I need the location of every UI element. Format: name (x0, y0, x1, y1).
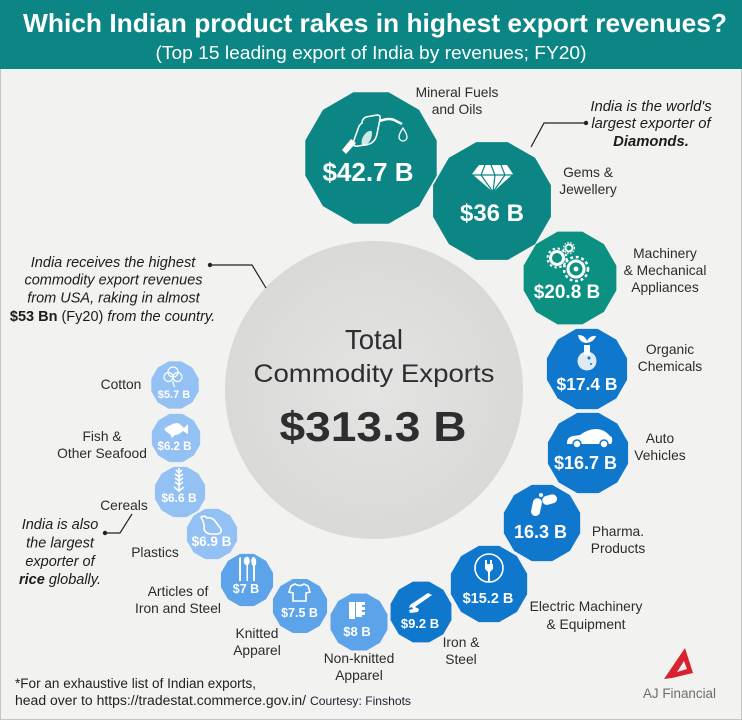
callout: USA revenue: commodity export revenues (24, 272, 203, 288)
center circle: total commodity exports (225, 241, 523, 539)
badge: auto vehicles: $16.7 B (554, 453, 617, 473)
badge: plastics: $6.9 B (192, 534, 232, 549)
center circle: total commodity exports: Commodity Exports (254, 360, 494, 388)
icon: cotton (164, 367, 182, 387)
label: auto vehicles: Vehicles (634, 448, 686, 463)
icon: fish (164, 423, 188, 438)
label: knitted apparel: Apparel (233, 643, 281, 658)
icon: capsules (530, 493, 558, 517)
callout: USA revenue: from USA, raking in almost (27, 290, 201, 306)
label: cotton: Cotton (101, 377, 141, 392)
badge: pharma (504, 485, 580, 561)
icon: wheat (174, 468, 184, 492)
label: iron and steel: Steel (445, 652, 477, 667)
icon: fuel nozzle (342, 115, 407, 154)
label: gems: Gems & (563, 165, 613, 180)
badge: knitted apparel (273, 579, 327, 633)
badge: cotton: $5.7 B (158, 389, 190, 401)
badge: articles of iron and steel: $7 B (233, 582, 259, 596)
label: auto vehicles: Auto (646, 431, 674, 446)
label: knitted apparel: Knitted (236, 626, 278, 641)
label: mineral fuels: Mineral Fuels (416, 85, 498, 100)
logo: AJ Financial: AJ Financial (643, 686, 716, 701)
label: organic chemicals: Organic (646, 342, 694, 357)
badge: articles of iron and steel (221, 554, 273, 606)
icon: car (567, 429, 612, 448)
badge: non-knitted apparel (331, 594, 387, 650)
badge: auto vehicles (548, 413, 628, 493)
label: fish and seafood: Other Seafood (57, 446, 147, 461)
label: cereals: Cereals (100, 498, 148, 513)
callout: rice (19, 514, 132, 588)
badge: organic chemicals: $17.4 B (557, 374, 617, 394)
callout: rice: India is also (22, 517, 98, 533)
label: iron and steel: Iron & (443, 635, 479, 650)
badge: electric machinery: $15.2 B (463, 591, 513, 607)
icon: fabric roll (349, 602, 365, 619)
badge: machinery (524, 232, 616, 324)
label: machinery: Machinery (633, 246, 697, 261)
label: pharma: Products (591, 541, 645, 556)
callout: rice: exporter of (25, 554, 97, 570)
badge: iron and steel: $9.2 B (401, 616, 439, 631)
label: organic chemicals: Chemicals (638, 359, 702, 374)
icon: diamond (472, 165, 513, 192)
center circle: total commodity exports: $313.3 B (280, 403, 466, 450)
label: mineral fuels: and Oils (432, 102, 482, 117)
badge: organic chemicals (547, 329, 627, 409)
icon: gears (548, 242, 588, 281)
title: Which Indian product rakes in highest export revenues? (23, 8, 727, 38)
callout: diamonds: Diamonds. (613, 134, 689, 150)
badge: iron and steel (391, 582, 451, 642)
badge: non-knitted apparel: $8 B (343, 624, 371, 639)
footnote: head over to https://tradestat.commerce.gov.in/ (15, 693, 306, 708)
badge: cereals: $6.6 B (161, 491, 197, 505)
badge: fish and seafood: $6.2 B (158, 441, 191, 453)
badge: knitted apparel: $7.5 B (281, 606, 318, 620)
badge: machinery: $20.8 B (534, 282, 600, 303)
callout: rice: the largest (26, 536, 95, 552)
label: fish and seafood: Fish & (82, 429, 122, 444)
label: machinery: & Mechanical (624, 263, 706, 278)
icon: steel beam (409, 593, 432, 613)
icon: plastic bag (201, 516, 221, 534)
badge: mineral fuels and oils (305, 92, 437, 224)
callout: USA revenue: India receives the highest (31, 255, 195, 271)
footnote (15, 676, 306, 708)
callout: diamonds (531, 99, 713, 150)
courtesy: Courtesy: Finshots (310, 694, 411, 708)
icon: plug (475, 554, 503, 582)
label: machinery: Appliances (631, 280, 699, 295)
center circle: total commodity exports: Total (345, 324, 403, 355)
header banner (0, 0, 742, 69)
icon: t-shirt (289, 584, 310, 601)
label: non-knitted apparel: Non-knitted (324, 651, 394, 666)
label: non-knitted apparel: Apparel (335, 668, 383, 683)
logo: AJ Financial (643, 648, 716, 701)
badge: gems and jewellery: $36 B (460, 200, 524, 227)
label: electric machinery: & Equipment (546, 617, 626, 632)
callout: diamonds: largest exporter of (591, 116, 713, 132)
badge: fish and seafood (152, 414, 200, 462)
label: electric machinery: Electric Machinery (530, 599, 642, 614)
subtitle: (Top 15 leading export of India by revenues; FY20) (156, 43, 586, 63)
footnote: *For an exhaustive list of Indian exports, (15, 676, 256, 691)
callout: USA revenue (10, 255, 266, 325)
badge: electric machinery (451, 546, 527, 622)
badge: gems and jewellery (433, 142, 551, 260)
label: gems: Jewellery (559, 182, 617, 197)
label: plastics: Plastics (131, 545, 179, 560)
badge: mineral fuels and oils: $42.7 B (322, 157, 414, 187)
icon: cutlery (239, 557, 256, 581)
callout: USA revenue: $53 Bn (Fy20) from the country. (10, 309, 215, 325)
label: pharma: Pharma. (592, 524, 644, 539)
label: articles of iron and steel: Iron and Steel (135, 601, 221, 616)
badge: cotton (151, 361, 199, 409)
badge: plastics (187, 509, 237, 559)
icon: flask with leaves (578, 335, 596, 370)
callout: diamonds: India is the world's (590, 99, 712, 115)
label: articles of iron and steel: Articles of (148, 584, 208, 599)
badge: pharma: 16.3 B (514, 522, 567, 542)
badge: cereals (155, 467, 205, 517)
callout: rice: rice globally. (19, 572, 101, 588)
